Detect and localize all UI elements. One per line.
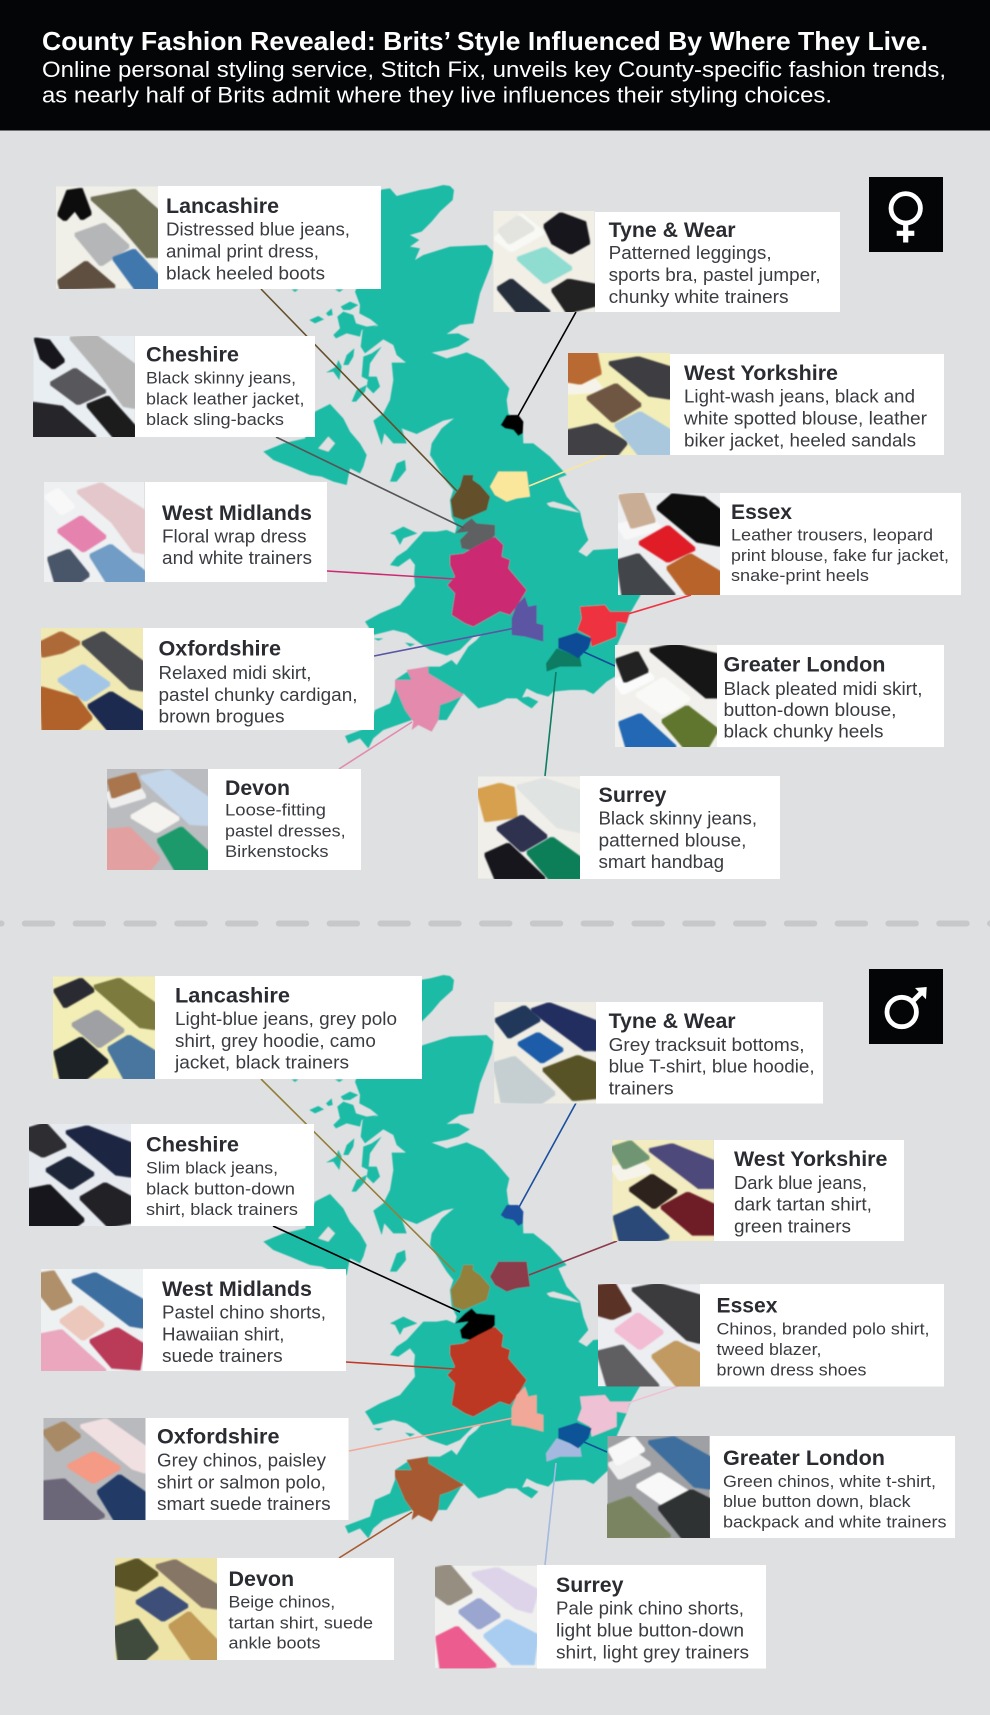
panel: Lancashire women: [56, 186, 381, 289]
heading: Oxfordshire: Oxfordshire: [158, 636, 281, 660]
description: backpack and white trainers: [723, 1512, 946, 1532]
description: smart suede trainers: [157, 1494, 331, 1514]
description: animal print dress,: [166, 241, 319, 261]
description: Slim black jeans,: [146, 1158, 278, 1178]
description: button-down blouse,: [724, 700, 896, 720]
description: Leather trousers, leopard: [731, 525, 933, 544]
description: [146, 1158, 298, 1219]
photo: Devon outfit: [107, 769, 208, 870]
description: smart handbag: [598, 852, 724, 872]
heading: Cheshire: Cheshire: [146, 342, 239, 366]
description: pastel dresses,: [225, 822, 346, 840]
heading: West Yorkshire: West Yorkshire: [684, 361, 838, 385]
description: [166, 220, 350, 283]
photo: Tyne & Wear men outfit: [494, 1002, 596, 1104]
description: black sling-backs: [146, 410, 284, 429]
subtitle: as nearly half of Brits admit where they live influences their styling choices.: [42, 82, 832, 108]
subtitle: [42, 57, 946, 108]
heading: Surrey: Surrey: [556, 1573, 624, 1597]
description: dark tartan shirt,: [734, 1195, 872, 1215]
panel: Tyne & Wear women: [494, 211, 840, 312]
description: brown dress shoes: [716, 1360, 866, 1379]
description: [174, 1009, 397, 1073]
photo: Essex men outfit: [598, 1284, 700, 1386]
description: [734, 1173, 872, 1236]
leader lines: menswear: [261, 1079, 679, 1565]
description: tweed blazer,: [716, 1340, 822, 1359]
description: [146, 369, 304, 429]
description: ankle boots: [228, 1634, 320, 1653]
panel: West Midlands women: [44, 482, 327, 582]
description: [683, 387, 927, 450]
description: Black skinny jeans,: [598, 808, 757, 828]
heading: Essex: Essex: [731, 500, 792, 524]
description: jacket, black trainers: [174, 1053, 349, 1073]
description: Pale pink chino shorts,: [556, 1599, 744, 1619]
description: black chunky heels: [724, 722, 884, 742]
title: County Fashion Revealed: Brits’ Style Influenced By Where They Live.: [42, 26, 928, 56]
county: Tyne & Wear: [501, 1205, 523, 1226]
description: [609, 243, 821, 307]
county: West Yorkshire: [490, 472, 530, 502]
photo: Cheshire men outfit: [29, 1124, 131, 1226]
panel: Oxfordshire women: [41, 628, 374, 730]
county: Tyne & Wear: [501, 415, 523, 436]
county: Lancashire: [451, 475, 490, 520]
description: tartan shirt, suede: [228, 1613, 373, 1632]
description: white spotted blouse, leather: [683, 408, 927, 428]
panel: Devon men: [115, 1558, 394, 1660]
photo: Tyne & Wear outfit: [494, 211, 595, 312]
panel: Greater London women: [615, 645, 944, 747]
county: Essex: [577, 605, 630, 647]
heading: Greater London: Greater London: [724, 652, 886, 676]
county: Surrey: [546, 648, 582, 672]
description: [609, 1035, 815, 1098]
description: Dark blue jeans,: [734, 1173, 867, 1193]
description: Hawaiian shirt,: [162, 1324, 284, 1344]
county: Lancashire: [451, 1265, 490, 1310]
description: Grey chinos, paisley: [157, 1451, 326, 1471]
county: Surrey: [546, 1438, 582, 1462]
description: Beige chinos,: [228, 1593, 335, 1612]
description: [724, 679, 922, 742]
heading: West Yorkshire: West Yorkshire: [734, 1147, 887, 1171]
photo: Greater London men outfit: [607, 1436, 710, 1538]
description: black heeled boots: [166, 263, 325, 283]
description: Black skinny jeans,: [146, 369, 296, 388]
description: brown brogues: [158, 706, 284, 726]
description: pastel chunky cardigan,: [158, 685, 358, 705]
description: blue button down, black: [723, 1492, 911, 1511]
photo: Cheshire outfit: [33, 336, 135, 437]
description: [556, 1599, 749, 1662]
heading: Tyne & Wear: Tyne & Wear: [609, 218, 736, 242]
county: West Midlands: [447, 1327, 527, 1417]
description: Grey tracksuit bottoms,: [609, 1035, 805, 1055]
panel: West Midlands men: [41, 1269, 346, 1371]
panel: Tyne & Wear men: [494, 1002, 823, 1104]
description: [716, 1319, 930, 1379]
photo: Oxfordshire outfit: [41, 628, 143, 730]
photo: Surrey outfit: [478, 776, 580, 879]
heading: West Midlands: West Midlands: [162, 1277, 312, 1301]
description: [723, 1472, 946, 1532]
panel: Cheshire men: [29, 1124, 314, 1226]
description: [731, 525, 949, 585]
description: Birkenstocks: [225, 842, 328, 861]
subtitle: Online personal styling service, Stitch Fix, unveils key County-specific fashion trends,: [42, 57, 946, 82]
map: UK womenswear: [263, 185, 641, 748]
panel: Essex men: [598, 1284, 944, 1386]
description: shirt, black trainers: [146, 1200, 298, 1219]
icon: male symbol: [869, 969, 943, 1044]
heading: West Midlands: West Midlands: [162, 501, 312, 525]
county: Essex: [577, 1395, 630, 1437]
photo: West Midlands men outfit: [41, 1269, 143, 1371]
photo: Lancashire men outfit: [53, 976, 155, 1079]
photo: Surrey men outfit: [435, 1565, 537, 1668]
county: Oxfordshire: [512, 1387, 543, 1432]
header banner: [0, 0, 990, 130]
description: Patterned leggings,: [609, 243, 772, 263]
description: [162, 526, 312, 568]
description: patterned blouse,: [598, 830, 746, 850]
panel: Oxfordshire men: [44, 1418, 348, 1520]
heading: Devon: Devon: [225, 776, 290, 800]
description: [162, 1303, 326, 1366]
description: Green chinos, white t-shirt,: [723, 1472, 936, 1491]
map: UK menswear: [263, 975, 641, 1538]
description: Chinos, branded polo shirt,: [716, 1319, 930, 1338]
description: [228, 1593, 373, 1653]
description: black leather jacket,: [146, 390, 304, 409]
panel: Cheshire women: [34, 336, 315, 437]
description: trainers: [609, 1078, 674, 1098]
description: sports bra, pastel jumper,: [609, 265, 821, 285]
panel: Greater London men: [608, 1436, 955, 1538]
county: West Yorkshire: [490, 1262, 530, 1292]
description: Relaxed midi skirt,: [158, 663, 312, 683]
heading: Greater London: Greater London: [723, 1446, 885, 1470]
county: West Midlands: [447, 537, 527, 627]
county: Oxfordshire: [512, 597, 543, 642]
heading: Devon: Devon: [228, 1567, 294, 1591]
panel: Surrey women: [478, 776, 780, 879]
description: Loose-fitting: [225, 801, 326, 820]
description: Distressed blue jeans,: [166, 220, 350, 240]
description: shirt, grey hoodie, camo: [175, 1031, 376, 1051]
description: print blouse, fake fur jacket,: [731, 546, 949, 565]
leader lines: womenswear: [261, 289, 691, 776]
heading: Cheshire: Cheshire: [146, 1133, 239, 1157]
photo: West Yorkshire men outfit: [612, 1140, 714, 1241]
description: suede trainers: [162, 1346, 283, 1366]
photo: Devon men outfit: [115, 1558, 217, 1660]
description: shirt or salmon polo,: [157, 1472, 326, 1492]
description: and white trainers: [162, 548, 312, 568]
photo: Oxfordshire men outfit: [44, 1418, 146, 1520]
description: chunky white trainers: [609, 287, 789, 307]
heading: Surrey: Surrey: [598, 783, 667, 807]
county: Greater London: [558, 1423, 592, 1448]
description: Light-blue jeans, grey polo: [175, 1009, 397, 1029]
photo: Greater London outfit: [615, 645, 717, 747]
description: [598, 808, 757, 872]
description: Floral wrap dress: [162, 526, 307, 546]
panel: Essex women: [618, 493, 961, 595]
heading: Lancashire: Lancashire: [175, 984, 290, 1008]
description: blue T-shirt, blue hoodie,: [609, 1057, 815, 1077]
county: Devon: [395, 1457, 464, 1522]
description: biker jacket, heeled sandals: [684, 430, 916, 450]
county: Cheshire: [455, 518, 495, 552]
panel: Surrey men: [435, 1565, 766, 1668]
panel: West Yorkshire women: [568, 353, 944, 455]
panel: Lancashire men: [53, 976, 422, 1079]
county: Cheshire: [455, 1308, 495, 1342]
county: Greater London: [558, 633, 592, 658]
description: shirt, light grey trainers: [556, 1642, 749, 1662]
description: green trainers: [734, 1216, 851, 1236]
county: Devon: [395, 667, 464, 732]
heading: Oxfordshire: Oxfordshire: [157, 1425, 280, 1449]
photo: Lancashire outfit: [56, 186, 158, 289]
panel: West Yorkshire men: [612, 1140, 904, 1241]
photo: West Midlands outfit: [44, 482, 145, 582]
description: Light-wash jeans, black and: [684, 387, 915, 407]
description: Pastel chino shorts,: [162, 1303, 326, 1323]
heading: Essex: Essex: [716, 1293, 778, 1317]
heading: Tyne & Wear: Tyne & Wear: [609, 1009, 736, 1033]
description: light blue button-down: [556, 1620, 744, 1640]
description: [157, 1451, 331, 1514]
photo: Essex outfit: [618, 493, 720, 595]
description: [225, 801, 346, 861]
description: Black pleated midi skirt,: [724, 679, 922, 699]
description: black button-down: [146, 1179, 295, 1198]
heading: Lancashire: Lancashire: [166, 194, 279, 218]
description: snake-print heels: [731, 566, 869, 585]
description: [158, 663, 358, 726]
photo: West Yorkshire outfit: [568, 353, 670, 455]
icon: female symbol: [869, 177, 943, 252]
panel: Devon women: [107, 769, 361, 870]
